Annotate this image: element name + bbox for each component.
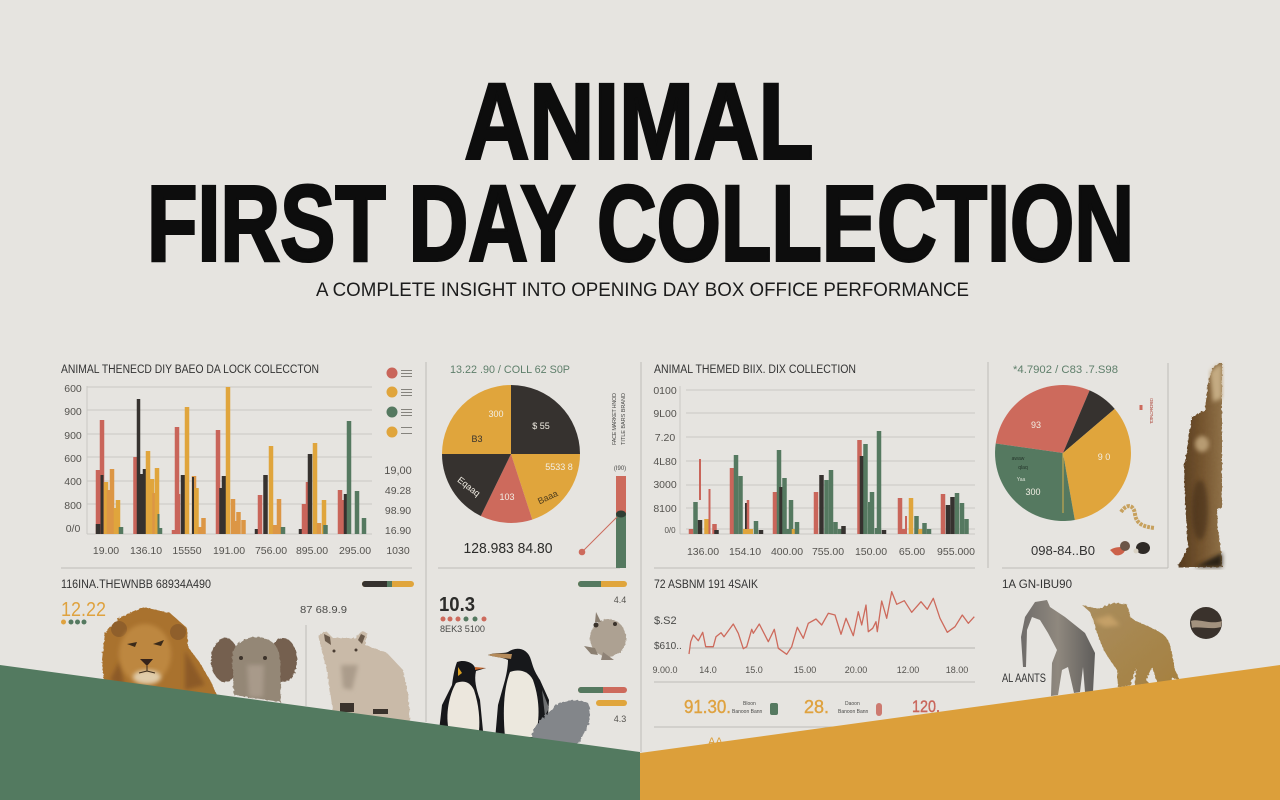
y axis labels: 0/0 — [66, 523, 80, 535]
x axis labels: 136.10 — [130, 545, 162, 557]
x axis labels: 19.00 — [93, 545, 119, 557]
stat caption: Bloon — [743, 701, 756, 707]
y axis labels: 0100 — [653, 385, 677, 397]
pie chart: awaw — [1012, 456, 1025, 462]
divider — [305, 625, 307, 706]
panel: bottom left stats — [61, 579, 414, 706]
pie chart: $ 55 — [532, 421, 550, 431]
progress pill — [578, 687, 627, 693]
y axis labels: 9L00 — [653, 408, 677, 420]
pie heading: 13.22 .90 / COLL 62 S0P — [450, 364, 570, 376]
image: grey furry animal — [532, 700, 590, 745]
section heading: 1A GN-IBU90 — [1002, 579, 1072, 591]
icon: red marker — [876, 703, 882, 716]
stat fragment behind band: AA — [708, 736, 723, 748]
x axis labels: 12.00 — [897, 665, 919, 675]
image: small fluffy animal — [584, 612, 626, 660]
small caption: 87 68.9.9 — [300, 605, 347, 616]
y axis labels: 900 — [64, 430, 82, 442]
stat caption — [732, 701, 763, 715]
legend — [386, 368, 412, 438]
stat caption: Banoon Bann — [732, 709, 763, 715]
vertical caption — [612, 393, 627, 472]
panel: line chart and stats — [652, 579, 975, 748]
green diagonal band — [0, 665, 640, 800]
small caption: 8EK3 5100 — [440, 624, 485, 634]
side values: 98.90 — [385, 505, 411, 517]
x axis labels: 756.00 — [255, 545, 287, 557]
yellow diagonal band — [640, 665, 1280, 800]
pie chart: 93 — [1031, 420, 1041, 430]
y axis labels: 8100 — [653, 503, 677, 515]
y axis labels: $610.. — [654, 641, 682, 652]
x axis labels — [93, 545, 371, 557]
y axis labels: 900 — [64, 406, 82, 418]
pie chart — [995, 385, 1131, 521]
image: textured circle — [1190, 607, 1222, 639]
pie chart: 5533 8 — [545, 462, 573, 472]
stat: yellow value: 91.30. — [684, 697, 731, 717]
y axis labels — [64, 383, 82, 535]
x axis labels: 15.0 — [745, 665, 763, 675]
vertical caption: FACE MARKET HNOD — [612, 393, 618, 445]
panel: left bar chart — [61, 364, 412, 557]
y axis labels: $.S2 — [654, 615, 677, 627]
section heading: 116INA.THEWNBB 68934A490 — [61, 579, 211, 591]
bars — [691, 431, 966, 534]
stacked progress column — [579, 476, 626, 568]
image: pale rhino-like animal — [318, 631, 410, 722]
progress pill — [596, 700, 627, 706]
stat caption — [838, 701, 869, 715]
stat caption: Banoon Bann — [838, 709, 869, 715]
y axis labels: 800 — [64, 500, 82, 512]
pie chart: B3 — [471, 434, 483, 444]
progress pill — [578, 581, 627, 587]
x axis labels: 14.0 — [699, 665, 717, 675]
y axis labels: 0/0 — [664, 526, 676, 535]
caption: AL AANTS — [1002, 673, 1046, 685]
y axis labels — [654, 615, 682, 652]
pie chart: 9 0 — [1098, 452, 1110, 462]
pie chart: Yaa — [1017, 477, 1025, 483]
subtitle: A COMPLETE INSIGHT INTO OPENING DAY BOX OFFICE PERFORMANCE — [316, 280, 969, 301]
side values: 16.90 — [385, 525, 411, 537]
x axis labels: 191.00 — [213, 545, 245, 557]
small value: 4.4 — [614, 595, 626, 605]
chart heading: ANIMAL THEMED BIIX. DIX COLLECTION — [654, 364, 856, 376]
icon: small striped snake — [1121, 506, 1155, 528]
side values: 1030 — [386, 545, 410, 557]
pie total: 098-84..B0 — [1031, 543, 1095, 558]
pie chart: Eqaaq — [456, 475, 482, 499]
side values: 19,00 — [384, 465, 412, 477]
y axis labels: 4L80 — [653, 456, 677, 468]
x axis labels: 154.10 — [729, 546, 761, 558]
icon: small animals — [1110, 541, 1150, 555]
y axis labels — [653, 385, 677, 535]
pie chart — [442, 385, 580, 523]
vertical caption: TITLE BARS BRAND — [621, 393, 627, 445]
small red caption: TOTAL CARD RED — [1149, 397, 1154, 424]
section heading: 72 ASBNM 191 4SAIK — [654, 579, 758, 591]
x axis labels: 136.00 — [687, 546, 719, 558]
x axis labels: 150.00 — [855, 546, 887, 558]
image: elephant — [211, 637, 297, 702]
x axis labels: 955.000 — [937, 546, 975, 558]
panel: bottom middle stats — [439, 581, 627, 724]
y axis labels: 600 — [64, 453, 82, 465]
y axis labels: 400 — [64, 476, 82, 488]
panel dividers — [61, 362, 1168, 752]
x axis labels — [687, 546, 975, 558]
pie total: 128.983 84.80 — [464, 540, 552, 557]
rule — [654, 682, 975, 727]
title: ANIMAL — [464, 60, 814, 182]
pie chart: 300 — [488, 409, 504, 419]
gridlines and axis — [680, 386, 975, 534]
stat caption: Daoon — [845, 701, 860, 707]
image: lion — [102, 607, 217, 695]
x axis labels: 755.00 — [812, 546, 844, 558]
x axis labels: 15.00 — [794, 665, 816, 675]
panel: left pie chart — [442, 364, 627, 568]
pie heading: *4.7902 / C83 .7.S98 — [1013, 364, 1118, 376]
panel: right bar chart — [653, 364, 975, 558]
x axis labels: 18.00 — [946, 665, 968, 675]
vertical caption: (I90) — [614, 466, 626, 472]
icon: green marker — [770, 703, 778, 715]
line series — [689, 592, 974, 654]
image: right penguin — [488, 649, 549, 740]
image: tall furry animal — [1178, 363, 1222, 567]
stat value: 10.3 — [439, 594, 475, 616]
gridlines and axis — [87, 386, 372, 534]
x axis labels: 895.00 — [296, 545, 328, 557]
stat dots — [440, 616, 486, 622]
stat value: 12.22 — [61, 599, 106, 621]
y axis labels: 7.20 — [655, 432, 675, 444]
panel: right pie chart — [995, 364, 1154, 558]
small red caption — [1141, 397, 1154, 424]
x axis labels — [652, 665, 968, 675]
chart heading: ANIMAL THENECD DIY BAEO DA LOCK COLECCTON — [61, 364, 319, 376]
y axis labels: 3000 — [653, 479, 677, 491]
image: grey elephant — [1021, 600, 1095, 696]
image: tan lion cub — [1082, 603, 1180, 687]
panel: bottom right animals — [1002, 579, 1222, 696]
pie chart: qlaq — [1018, 465, 1028, 471]
progress pill — [362, 581, 414, 587]
stat: red value: 120. — [912, 697, 940, 716]
x axis labels: 65.00 — [899, 546, 925, 558]
x axis labels: 400.00 — [771, 546, 803, 558]
pie chart: 300 — [1025, 487, 1041, 497]
image: left penguin — [439, 661, 486, 731]
stat dots — [61, 620, 86, 624]
side values — [384, 465, 412, 557]
baseline — [690, 647, 975, 649]
bars — [98, 387, 364, 534]
y axis labels: 600 — [64, 383, 82, 395]
x axis labels: 15550 — [172, 545, 202, 557]
pie chart: 103 — [499, 492, 515, 502]
side values: 49.28 — [385, 485, 411, 497]
pie chart: Baaa — [536, 488, 559, 506]
small value: 4.3 — [614, 714, 626, 724]
x axis labels: 295.00 — [339, 545, 371, 557]
stat: yellow value: 28. — [804, 697, 829, 717]
x axis labels: 9.00.0 — [652, 665, 678, 675]
x axis labels: 20.00 — [845, 665, 867, 675]
title — [147, 60, 1134, 284]
